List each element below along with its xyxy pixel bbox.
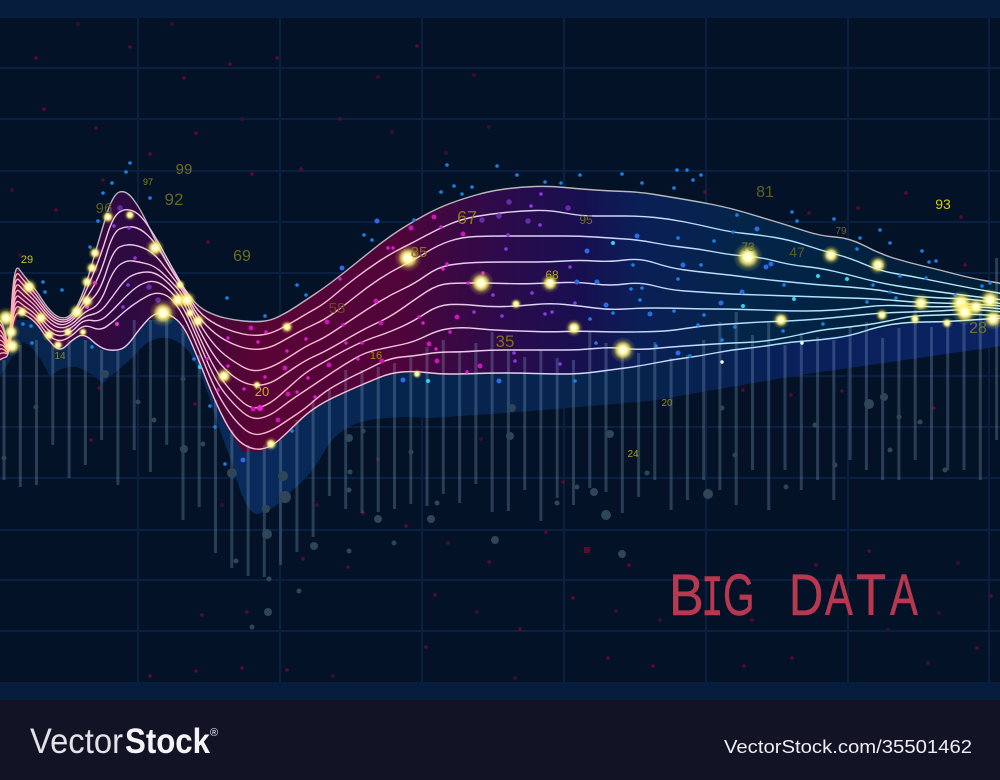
title: BIG DATA: D: [789, 564, 823, 628]
floating numbers: [21, 161, 987, 460]
glowing data points: [0, 209, 1000, 451]
top strip: [0, 0, 1000, 18]
title: BIG DATA: [669, 562, 918, 633]
bottom strip: [0, 682, 1000, 700]
floating numbers: 99: [176, 161, 192, 178]
floating numbers: 67: [457, 208, 477, 228]
floating numbers: 16: [370, 350, 382, 362]
floating numbers: 68: [545, 268, 559, 282]
floating numbers: 28: [969, 320, 987, 337]
footer logo: Stock: [125, 722, 210, 761]
floating numbers: 35: [496, 332, 514, 351]
floating numbers: 47: [789, 244, 805, 260]
floating numbers: 92: [165, 190, 183, 209]
data band fill: [0, 186, 1000, 452]
floating numbers: 79: [835, 226, 847, 237]
title: BIG DATA: I: [701, 566, 724, 633]
floating numbers: 24: [627, 449, 639, 460]
title: BIG DATA: A: [890, 562, 918, 628]
floating numbers: 14: [54, 351, 66, 362]
floating numbers: 20: [661, 398, 673, 409]
floating numbers: 93: [935, 196, 951, 212]
floating numbers: 85: [411, 244, 427, 261]
title: BIG DATA: T: [856, 563, 886, 628]
grey particles medium: [105, 374, 884, 612]
title: BIG DATA: A: [825, 562, 853, 628]
title: BIG DATA: G: [723, 563, 755, 628]
blue particles: [23, 163, 990, 464]
footer url: VectorStock.com/35501462: [724, 737, 972, 757]
grey particles small: [279, 491, 291, 503]
grey particles: [232, 404, 869, 534]
data lines: [0, 186, 1000, 449]
floating numbers: 95: [579, 213, 593, 227]
purple particles: [87, 194, 575, 364]
floating numbers: 20: [255, 384, 269, 399]
footer logo: Vector: [30, 722, 123, 761]
blue shadow area: [0, 320, 1000, 514]
footer logo: ®: [210, 727, 218, 739]
floating numbers: 69: [233, 248, 251, 265]
floating numbers: 81: [756, 184, 774, 201]
magenta particles: [207, 217, 483, 420]
floating numbers: 73: [741, 240, 755, 254]
floating numbers: 58: [329, 300, 345, 317]
footer bar: [0, 700, 1000, 780]
title: BIG DATA: B: [669, 562, 704, 628]
footer logo: [30, 722, 218, 761]
vertical bars: [4, 258, 997, 577]
floating numbers: 96: [96, 200, 112, 217]
floating numbers: 29: [21, 254, 33, 266]
grey particles tiny: [4, 379, 945, 627]
floating numbers: 97: [143, 177, 153, 187]
